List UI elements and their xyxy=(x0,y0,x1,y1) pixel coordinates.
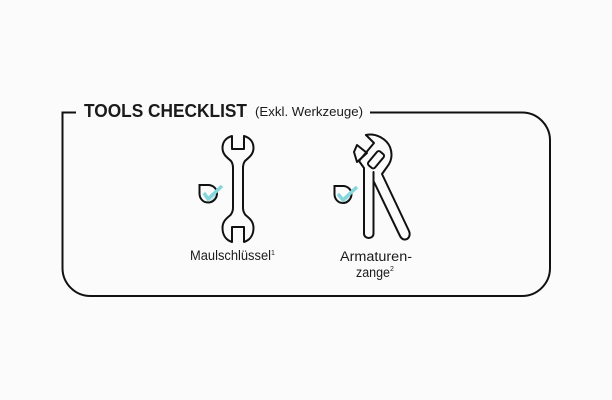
label: Maulschlüssel: Maulschlüssel xyxy=(190,248,271,263)
label: Armaturenzange xyxy=(340,249,412,280)
label: Armaturenzange: 2 xyxy=(390,266,394,273)
label: Armaturenzange: zange xyxy=(356,265,390,280)
heading: TOOLS CHECKLIST xyxy=(84,100,248,121)
icon: check drop for wrench xyxy=(200,185,222,202)
subheading: (Exkl. Werkzeuge) xyxy=(255,104,363,119)
panel: checklist frame xyxy=(62,112,550,296)
icon: water pump pliers xyxy=(354,135,410,240)
icon: open-end wrench xyxy=(222,136,254,242)
label: Armaturenzange: Armaturen- xyxy=(340,249,412,264)
icon: check drop for pliers xyxy=(334,186,357,203)
label: Maulschlüssel: 1 xyxy=(271,250,275,257)
